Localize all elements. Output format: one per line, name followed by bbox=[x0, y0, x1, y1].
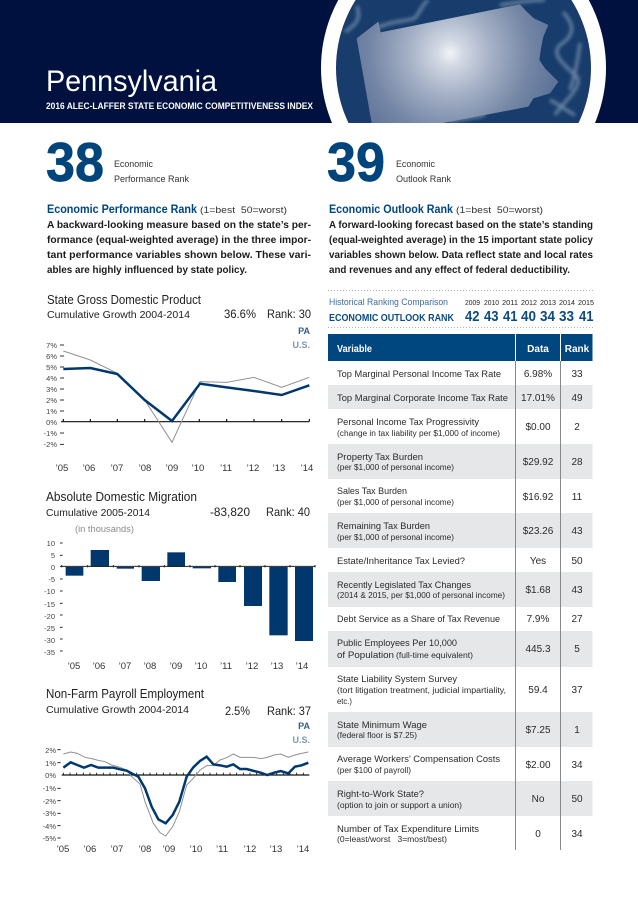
heading: Non-Farm Payroll Employment bbox=[46, 687, 204, 701]
line chart: 5% bbox=[46, 363, 57, 372]
row: workers compensation: $2.00 bbox=[525, 760, 551, 771]
row: public employees: (full-time equivalent) bbox=[396, 651, 473, 660]
line chart: 0% bbox=[46, 418, 57, 427]
line chart: -1% bbox=[44, 429, 57, 438]
rank values: 41 bbox=[503, 309, 518, 325]
description: A backward-looking measure based on the state’s per- bbox=[47, 219, 311, 231]
description bbox=[329, 219, 593, 276]
subheading: Cumulative Growth 2004-2014 bbox=[47, 310, 190, 321]
row: public employees bbox=[337, 638, 580, 661]
rank values: 41 bbox=[579, 309, 594, 325]
line chart: 7% bbox=[46, 341, 57, 350]
row: state minimum wage: 1 bbox=[574, 725, 580, 736]
panel: economic performance rank bbox=[46, 131, 311, 276]
rank label bbox=[114, 159, 189, 184]
description: A forward-looking forecast based on the state’s standing bbox=[329, 219, 593, 231]
row: state minimum wage: $7.25 bbox=[525, 725, 551, 736]
years: 2015 bbox=[578, 298, 594, 307]
bar chart: 5 bbox=[51, 551, 55, 560]
description: (equal-weighted average) in the 15 important state policy bbox=[329, 234, 593, 246]
description: formance (equal-weighted average) in the three impor- bbox=[47, 234, 311, 246]
row: top marginal personal income tax rate: Top Marginal Personal Income Tax Rate bbox=[337, 369, 501, 380]
row: sales tax burden: $16.92 bbox=[523, 492, 554, 503]
row: public employees: 5 bbox=[574, 644, 580, 655]
row: tax expenditure limits: 34 bbox=[571, 829, 583, 840]
row: tax expenditure limits: Number of Tax Expenditure Limits bbox=[337, 824, 479, 835]
row: state minimum wage bbox=[337, 720, 580, 740]
row: remaining tax burden: Remaining Tax Burden bbox=[337, 521, 430, 532]
row: top marginal corporate income tax rate: 49 bbox=[571, 393, 583, 404]
bar chart: ’08 bbox=[144, 661, 156, 672]
line chart: ’10 bbox=[190, 844, 202, 855]
row: sales tax burden bbox=[337, 486, 583, 507]
rank number 38: 38 bbox=[46, 131, 104, 193]
years: 2014 bbox=[559, 298, 575, 307]
row: property tax burden bbox=[337, 452, 583, 472]
stat value and rank bbox=[210, 505, 310, 519]
line chart: ’13 bbox=[273, 463, 285, 474]
line chart: ’05 bbox=[57, 844, 69, 855]
bar chart: ’14 bbox=[296, 661, 308, 672]
icon: Pennsylvania state map in a white ring bbox=[321, 0, 606, 123]
row: personal income tax progressivity: (change in tax liability per $1,000 of income) bbox=[337, 429, 500, 438]
row: recently legislated tax changes: $1.68 bbox=[525, 585, 551, 596]
bar chart: ’06 bbox=[93, 661, 105, 672]
bar chart: ’05 bbox=[68, 661, 80, 672]
row: workers compensation: (per $100 of payroll) bbox=[337, 766, 411, 775]
line chart: -1% bbox=[43, 784, 56, 793]
row: state liability system survey: 37 bbox=[571, 685, 583, 696]
years: 2012 bbox=[521, 298, 537, 307]
rank values: 34 bbox=[540, 309, 555, 325]
table header bbox=[328, 334, 592, 361]
legend: PA bbox=[298, 326, 310, 336]
description: variables shown below. Data reflect state and local rates bbox=[329, 249, 593, 261]
legend: U.S. bbox=[292, 735, 310, 745]
row: state liability system survey: State Liability System Survey bbox=[337, 674, 457, 685]
years: 2010 bbox=[484, 298, 499, 307]
row: workers compensation bbox=[337, 754, 583, 775]
rank number 39: 39 bbox=[327, 131, 385, 193]
rank values: 40 bbox=[521, 309, 536, 325]
description: tant performance variables shown below. These vari- bbox=[47, 249, 311, 261]
row: recently legislated tax changes: Recently Legislated Tax Changes bbox=[337, 580, 471, 591]
line chart: ’05 bbox=[56, 463, 68, 474]
line chart: ’11 bbox=[220, 463, 232, 474]
bar chart: ’13 bbox=[271, 661, 283, 672]
stat value and rank bbox=[224, 307, 311, 321]
rank label: Economic bbox=[396, 159, 435, 169]
line chart: ’07 bbox=[111, 463, 123, 474]
line chart: -2% bbox=[44, 440, 57, 449]
years bbox=[465, 298, 594, 307]
row: property tax burden: Property Tax Burden bbox=[337, 452, 423, 463]
stat value and rank: 36.6% bbox=[224, 307, 256, 321]
row: tax expenditure limits bbox=[337, 824, 583, 844]
unit note: (in thousands) bbox=[75, 524, 134, 534]
line chart: ’09 bbox=[163, 844, 175, 855]
row: sales tax burden: Sales Tax Burden bbox=[337, 486, 407, 497]
bar chart: 0 bbox=[51, 563, 55, 572]
row: property tax burden: 28 bbox=[571, 457, 583, 468]
row: tax expenditure limits: (0=least/worst 3=most/best) bbox=[337, 835, 447, 844]
row: personal income tax progressivity bbox=[337, 417, 580, 438]
rank values bbox=[465, 309, 594, 325]
row: estate/inheritance tax: Estate/Inheritance Tax Levied? bbox=[337, 556, 465, 567]
line chart: ’12 bbox=[244, 844, 256, 855]
label: Historical Ranking Comparison bbox=[329, 297, 448, 308]
bar chart: ’11 bbox=[220, 661, 232, 672]
line chart: ’08 bbox=[139, 844, 151, 855]
title: Pennsylvania bbox=[46, 65, 217, 98]
heading: (1=best 50=worst) bbox=[456, 205, 543, 216]
line chart: ’06 bbox=[84, 844, 96, 855]
line chart: 1% bbox=[45, 759, 56, 768]
line chart: ’13 bbox=[270, 844, 282, 855]
row: estate/inheritance tax: 50 bbox=[571, 556, 583, 567]
line chart: ’14 bbox=[297, 844, 309, 855]
row: state liability system survey: (tort litigation treatment, judicial impartiality, bbox=[337, 686, 506, 695]
line chart: 6% bbox=[46, 352, 57, 361]
line chart: -3% bbox=[43, 809, 56, 818]
row: recently legislated tax changes: 43 bbox=[571, 585, 583, 596]
heading: Economic Performance Rank bbox=[47, 202, 197, 216]
bar chart: -30 bbox=[44, 636, 55, 645]
bar chart: -15 bbox=[44, 600, 55, 609]
line chart: -5% bbox=[43, 834, 56, 843]
subheading: Cumulative 2005-2014 bbox=[46, 508, 150, 519]
line chart: 0% bbox=[45, 771, 56, 780]
row: public employees: of Population bbox=[337, 650, 394, 661]
row: property tax burden: $29.92 bbox=[523, 457, 554, 468]
heading: Economic Outlook Rank bbox=[329, 202, 453, 216]
subheading: Cumulative Growth 2004-2014 bbox=[46, 705, 189, 716]
bar chart: -5 bbox=[48, 575, 55, 584]
subtitle: 2016 ALEC-LAFFER STATE ECONOMIC COMPETITIVENESS INDEX bbox=[46, 101, 313, 111]
line chart bbox=[43, 746, 309, 855]
line chart: ’12 bbox=[247, 463, 259, 474]
legend: U.S. bbox=[292, 340, 310, 350]
row: state minimum wage: (federal floor is $7.25) bbox=[337, 731, 417, 740]
row: top marginal corporate income tax rate: 17.01% bbox=[521, 393, 555, 404]
line chart: ’09 bbox=[166, 463, 178, 474]
line chart bbox=[44, 341, 313, 474]
bar chart: -25 bbox=[44, 624, 55, 633]
row: public employees: 445.3 bbox=[525, 644, 551, 655]
historical ranking comparison bbox=[329, 297, 594, 325]
years: 2009 bbox=[465, 298, 480, 307]
legend: PA bbox=[298, 721, 310, 731]
row: estate/inheritance tax bbox=[337, 556, 583, 567]
row: personal income tax progressivity: $0.00 bbox=[525, 422, 551, 433]
header banner bbox=[0, 0, 638, 123]
bar chart: -10 bbox=[44, 587, 55, 596]
table header: Rank bbox=[565, 344, 590, 355]
row: state minimum wage: State Minimum Wage bbox=[337, 720, 427, 731]
row: workers compensation: Average Workers’ Compensation Costs bbox=[337, 754, 500, 765]
row: estate/inheritance tax: Yes bbox=[530, 556, 546, 567]
panel: non-farm payroll employment bbox=[43, 687, 311, 855]
row: recently legislated tax changes: (2014 & 2015, per $1,000 of personal income) bbox=[337, 591, 505, 600]
rank values: 42 bbox=[465, 309, 480, 325]
legend bbox=[292, 326, 310, 350]
legend bbox=[292, 721, 310, 745]
bar chart: ’09 bbox=[170, 661, 182, 672]
row: workers compensation: 34 bbox=[571, 760, 583, 771]
row: top marginal personal income tax rate: 33 bbox=[571, 369, 583, 380]
panel: state gross domestic product bbox=[44, 293, 313, 474]
bar chart: ’10 bbox=[195, 661, 207, 672]
table: policy variables bbox=[328, 334, 592, 850]
line chart: ’07 bbox=[111, 844, 123, 855]
description: ables are highly influenced by state policy. bbox=[47, 264, 247, 276]
line chart: ’11 bbox=[216, 844, 228, 855]
line chart: 3% bbox=[46, 385, 57, 394]
stat value and rank: Rank: 40 bbox=[266, 505, 310, 519]
row: debt service: Debt Service as a Share of Tax Revenue bbox=[337, 614, 500, 625]
row label: ECONOMIC OUTLOOK RANK bbox=[329, 312, 454, 324]
row: personal income tax progressivity: 2 bbox=[574, 422, 580, 433]
row: recently legislated tax changes bbox=[337, 580, 583, 600]
stat value and rank: Rank: 37 bbox=[267, 704, 311, 718]
rank label: Outlook Rank bbox=[396, 174, 452, 184]
rank label: Performance Rank bbox=[114, 174, 189, 184]
row: sales tax burden: (per $1,000 of personal income) bbox=[337, 498, 454, 507]
stat value and rank: 2.5% bbox=[225, 704, 250, 718]
panel: economic outlook rank bbox=[327, 131, 593, 276]
description: and revenues and any effect of federal deductibility. bbox=[329, 264, 570, 276]
heading: Absolute Domestic Migration bbox=[46, 490, 197, 504]
row: state liability system survey bbox=[337, 674, 583, 706]
row: right-to-work: No bbox=[532, 794, 545, 805]
rank label: Economic bbox=[114, 159, 153, 169]
row: tax expenditure limits: 0 bbox=[535, 829, 541, 840]
line chart: -2% bbox=[43, 797, 56, 806]
row: right-to-work: 50 bbox=[571, 794, 583, 805]
row: debt service bbox=[337, 614, 583, 625]
row: debt service: 27 bbox=[571, 614, 583, 625]
bar chart bbox=[44, 539, 315, 672]
line chart: 2% bbox=[46, 396, 57, 405]
heading bbox=[329, 202, 543, 216]
row: state liability system survey: 59.4 bbox=[528, 685, 548, 696]
row: remaining tax burden: $23.26 bbox=[523, 526, 554, 537]
table header: Variable bbox=[337, 344, 372, 355]
line chart: ’08 bbox=[139, 463, 151, 474]
panel: absolute domestic migration bbox=[44, 490, 315, 672]
row: personal income tax progressivity: Personal Income Tax Progressivity bbox=[337, 417, 479, 428]
years: 2011 bbox=[502, 298, 518, 307]
rank values: 33 bbox=[559, 309, 574, 325]
line chart: ’06 bbox=[83, 463, 95, 474]
row: top marginal corporate income tax rate: Top Marginal Corporate Income Tax Rate bbox=[337, 393, 508, 404]
bar chart: -20 bbox=[44, 612, 55, 621]
row: public employees: Public Employees Per 10,000 bbox=[337, 638, 457, 649]
line chart: -4% bbox=[43, 822, 56, 831]
heading: (1=best 50=worst) bbox=[200, 205, 287, 216]
line chart: 1% bbox=[46, 407, 57, 416]
row: top marginal personal income tax rate bbox=[337, 369, 583, 380]
row: right-to-work: Right-to-Work State? bbox=[337, 789, 424, 800]
bar chart: -35 bbox=[44, 648, 55, 657]
line chart: 4% bbox=[46, 374, 57, 383]
rank values: 43 bbox=[484, 309, 498, 325]
row: right-to-work: (option to join or support a union) bbox=[337, 801, 462, 810]
row: debt service: 7.9% bbox=[527, 614, 550, 625]
rank label bbox=[396, 159, 452, 184]
bar chart: 10 bbox=[47, 539, 55, 548]
line chart: ’14 bbox=[301, 463, 313, 474]
row: state liability system survey: etc.) bbox=[337, 697, 352, 706]
heading bbox=[47, 202, 287, 216]
years: 2013 bbox=[540, 298, 556, 307]
bar chart: ’12 bbox=[246, 661, 258, 672]
row: remaining tax burden bbox=[337, 521, 583, 542]
row: remaining tax burden: 43 bbox=[571, 526, 583, 537]
description bbox=[47, 219, 311, 276]
row: right-to-work bbox=[337, 789, 583, 810]
bar chart: ’07 bbox=[119, 661, 131, 672]
heading: State Gross Domestic Product bbox=[47, 293, 201, 307]
row: top marginal personal income tax rate: 6.98% bbox=[524, 369, 552, 380]
line chart: ’10 bbox=[192, 463, 204, 474]
line chart: 2% bbox=[45, 746, 56, 755]
stat value and rank bbox=[225, 704, 311, 718]
row: property tax burden: (per $1,000 of personal income) bbox=[337, 463, 454, 472]
row: remaining tax burden: (per $1,000 of personal income) bbox=[337, 533, 454, 542]
table header: Data bbox=[527, 344, 549, 355]
stat value and rank: -83,820 bbox=[210, 505, 250, 519]
row: sales tax burden: 11 bbox=[572, 492, 583, 503]
stat value and rank: Rank: 30 bbox=[267, 307, 311, 321]
